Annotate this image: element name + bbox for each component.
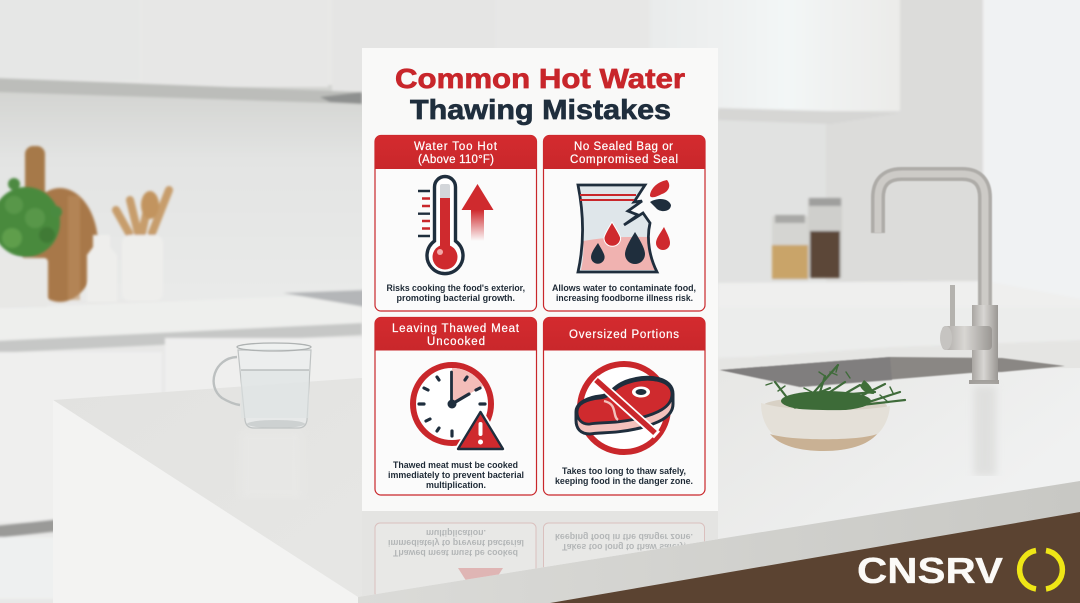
poster reflection on countertop: Thawed meat must be cooked [393, 547, 518, 558]
kitchen island [53, 368, 1080, 603]
heading: oversized portions: Oversized Portions [569, 329, 679, 341]
heading: leaving thawed meat: Uncooked [427, 336, 485, 348]
heading: water too hot: (Above 110°F) [418, 154, 494, 166]
heading: no sealed bag [570, 141, 678, 166]
poster reflection on countertop: Takes too long to thaw safely, [562, 541, 686, 552]
icon: clock with warning [413, 365, 503, 449]
heading: leaving thawed meat: Leaving Thawed Meat [392, 323, 520, 335]
icon: rising arrow [462, 184, 494, 241]
glass of water [214, 343, 311, 500]
title: Thawing Mistakes [410, 94, 671, 125]
background: spice jars [772, 198, 842, 280]
logo: CNSRV [857, 550, 1062, 591]
icon: yellow brackets logo [1020, 550, 1062, 589]
text: water too hot description [386, 283, 525, 304]
poster reflection on countertop: keeping food in the danger zone. [555, 531, 693, 542]
text: thawed meat description: immediately to prevent bacterial [388, 470, 524, 481]
sink [720, 357, 1065, 387]
poster reflection on countertop: multiplication. [426, 527, 486, 538]
poster reflection on countertop [374, 514, 718, 594]
text: water too hot description: promoting bacterial growth. [396, 293, 515, 304]
text: thawed meat description [388, 460, 524, 491]
faucet [878, 174, 999, 476]
background: cutting board [22, 146, 98, 302]
poster [362, 48, 718, 511]
heading: water too hot: Water Too Hot [414, 141, 498, 153]
text: oversized portions description [555, 466, 693, 487]
title [395, 63, 685, 125]
text: water too hot description: Risks cooking the food's exterior, [386, 283, 525, 294]
text: oversized portions description: Takes too long to thaw safely, [562, 466, 686, 477]
herb bowl [761, 365, 905, 451]
title: Common Hot Water [395, 63, 685, 94]
panel: water too hot [375, 136, 536, 311]
icon: thermometer [418, 176, 463, 274]
text: thawed meat description: Thawed meat must be cooked [393, 460, 518, 471]
poster reflection on countertop: immediately to prevent bacterial [388, 537, 524, 548]
text: thawed meat description: multiplication. [426, 480, 486, 491]
text: no sealed bag description: increasing foodborne illness risk. [556, 293, 693, 304]
panel: leaving thawed meat uncooked [375, 318, 536, 495]
icon: prohibited steak [576, 364, 673, 452]
background: bottle and utensil jar [87, 190, 169, 302]
logo: CNSRV: CNSRV [857, 550, 1003, 591]
heading: no sealed bag: No Sealed Bag or [574, 141, 673, 153]
text: no sealed bag description [552, 283, 696, 304]
icon: torn leaking bag [578, 180, 671, 272]
heading: no sealed bag: Compromised Seal [570, 154, 678, 166]
text: oversized portions description: keeping food in the danger zone. [555, 476, 693, 487]
panel: no sealed bag [544, 136, 705, 311]
heading: leaving thawed meat [392, 323, 520, 348]
panel: oversized portions [544, 318, 705, 495]
background: potted plant [0, 178, 62, 307]
heading: water too hot [414, 141, 498, 166]
text: no sealed bag description: Allows water to contaminate food, [552, 283, 696, 294]
